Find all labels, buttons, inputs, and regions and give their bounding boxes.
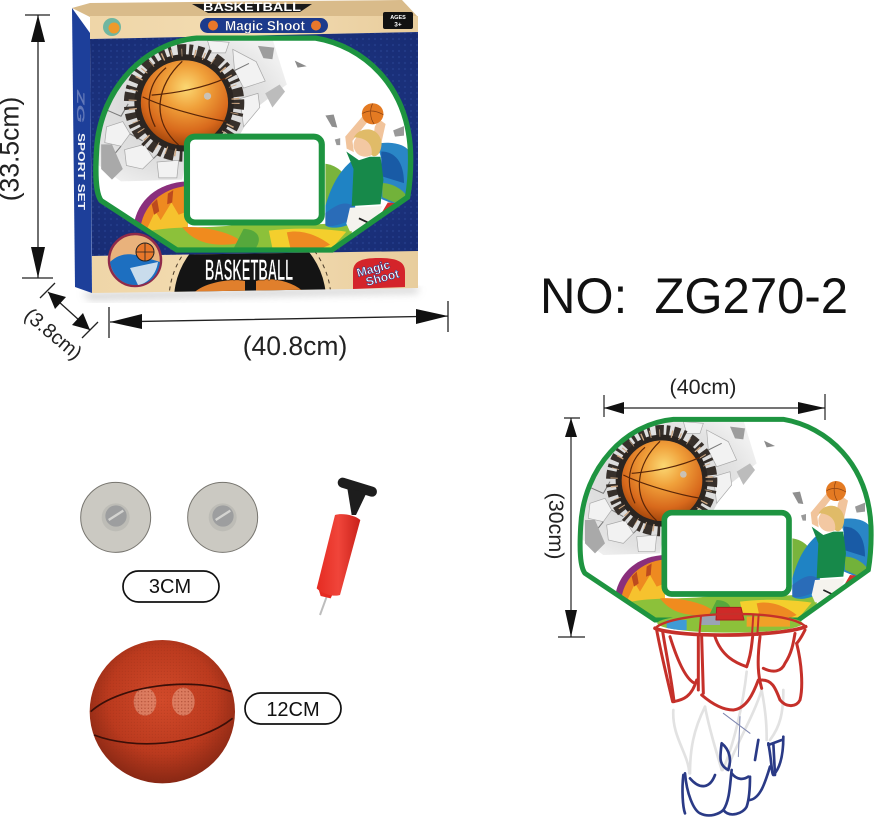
box blue panel bbox=[90, 32, 418, 256]
backboard bbox=[578, 419, 871, 627]
3cm size label bbox=[123, 571, 219, 602]
dimension: board height: (30cm) bbox=[544, 493, 568, 559]
dimension: board height bbox=[544, 418, 585, 637]
air pump bbox=[317, 483, 372, 615]
basketball hoop and net bbox=[655, 607, 806, 815]
red magic shoot badge bbox=[353, 257, 405, 289]
dimension: box depth: (3.8cm) bbox=[20, 304, 86, 365]
age badge bbox=[383, 12, 413, 29]
dimension: box width: (40.8cm) bbox=[243, 331, 347, 361]
dimension: board width bbox=[604, 375, 825, 420]
box logo bbox=[103, 18, 121, 36]
magic shoot header pill: Magic Shoot bbox=[225, 18, 305, 34]
3cm size label: 3CM bbox=[149, 576, 191, 598]
magic shoot header pill bbox=[200, 18, 328, 34]
box shadow bbox=[82, 287, 418, 300]
box top face bbox=[72, 0, 418, 17]
round hoop icon bbox=[109, 234, 161, 286]
age badge: AGES bbox=[390, 15, 406, 21]
12cm size label: 12CM bbox=[266, 699, 320, 721]
box side logo: ZG bbox=[74, 88, 86, 124]
red magic shoot badge: Shoot bbox=[364, 267, 401, 289]
net: red upper section bbox=[657, 630, 805, 710]
mount left bbox=[81, 482, 151, 552]
top flap cut-off title: BASKETBALL bbox=[203, 0, 301, 14]
top flap cut-off title bbox=[192, 0, 312, 14]
backboard on box bbox=[94, 38, 411, 257]
product box: BASKETBALL bbox=[205, 254, 293, 287]
net: thin blue-grey crossing strand bbox=[723, 713, 750, 757]
basketball emblem bbox=[169, 252, 331, 292]
dimension: box width bbox=[109, 301, 448, 361]
age badge: 3+ bbox=[394, 22, 402, 28]
rim bbox=[655, 614, 806, 635]
net: blue bottom section bbox=[683, 737, 783, 815]
box side text: sport set: SPORT SET bbox=[75, 133, 87, 211]
box top wood band bbox=[90, 16, 418, 39]
box side panel bbox=[72, 8, 92, 293]
dimension: board width: (40cm) bbox=[670, 375, 736, 399]
wall mounts bbox=[81, 482, 258, 552]
net: white lower section bbox=[673, 672, 783, 773]
dimension: box depth bbox=[20, 283, 98, 365]
box bottom wood band bbox=[92, 251, 418, 293]
12cm size label bbox=[245, 693, 341, 724]
model number heading: NO: ZG270-2 bbox=[540, 268, 848, 324]
small inflatable ball bbox=[90, 640, 235, 783]
red magic shoot badge: Magic bbox=[355, 257, 392, 280]
product box bbox=[72, 0, 418, 381]
mount right bbox=[188, 482, 258, 552]
dimension: box height bbox=[0, 15, 53, 278]
rim bracket bbox=[716, 607, 744, 620]
backboard seen through rim bbox=[655, 615, 805, 633]
